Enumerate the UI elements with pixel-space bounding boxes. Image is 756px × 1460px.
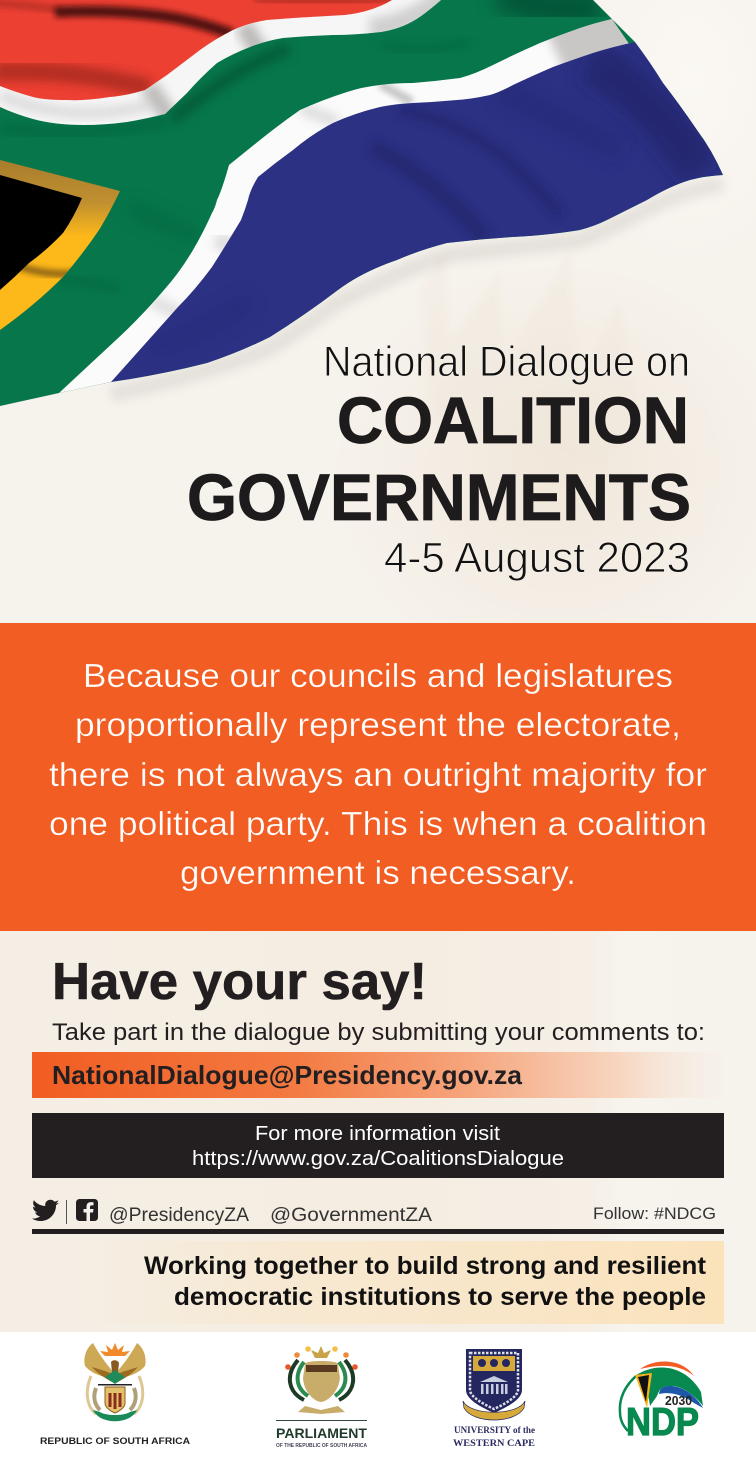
title: COALITION: COALITION [337,383,689,457]
flag shadow [111,184,723,394]
South African flag [0,0,756,420]
flag: gold chevron edge [0,160,120,330]
flag: lower white band [59,10,640,393]
email bar: NationalDialogue@Presidency.gov.za [52,1060,523,1090]
flag: upper white band [0,0,445,125]
handle: government: @GovernmentZA [270,1205,432,1226]
logo: parliament [276,1346,367,1449]
statement text: Because our councils and legislatures [83,658,673,695]
logo text: REPUBLIC OF SOUTH AFRICA [40,1436,190,1447]
tagline band: democratic institutions to serve the people [174,1283,706,1311]
title: GOVERNMENTS: GOVERNMENTS [187,460,691,534]
orange statement panel [0,623,756,931]
logo text: UNIVERSITY of the [454,1425,535,1435]
social media row [32,1199,716,1226]
tagline band: Working together to build strong and resilient [144,1252,707,1280]
title: date: 4-5 August 2023 [384,534,690,582]
logo: NDP 2030 [620,1361,703,1444]
information box [32,1113,724,1178]
statement text: government is necessary. [180,855,576,892]
icon: facebook [76,1199,98,1221]
title block [187,338,691,582]
statement text: one political party. This is when a coalition [49,806,707,843]
email bar [32,1052,724,1098]
information box: https://www.gov.za/CoalitionsDialogue [192,1148,564,1170]
logo text: PARLIAMENT [276,1425,367,1441]
flag: red stripe [0,0,400,100]
statement text [49,658,707,892]
hashtag: Follow: #NDCG [593,1204,716,1223]
logo: university of the western cape [453,1349,535,1448]
footer strip [0,1332,756,1460]
title: line 1: National Dialogue on [323,338,690,386]
logo: university of the western cape: WESTERN CAPE [453,1438,535,1448]
intro text: Take part in the dialogue by submitting your comments to: [52,1019,705,1046]
flag: blue stripe [111,42,723,382]
flag: green field [0,0,756,420]
statement text: there is not always an outright majority for [49,757,707,794]
statement text: proportionally represent the electorate, [75,707,681,744]
flag: black triangle [0,175,82,290]
logo: NDP 2030: 2030 [665,1394,692,1408]
heading: have your say: Have your say! [52,953,427,1011]
logo: coat of arms [40,1343,190,1447]
separator [66,1200,67,1224]
logo: NDP 2030: NDP [626,1401,699,1444]
tagline band [90,1241,724,1324]
handle: presidency: @PresidencyZA [109,1205,249,1226]
information box: For more information visit [255,1123,500,1145]
logo: parliament: OF THE REPUBLIC OF SOUTH AFRICA [276,1443,367,1449]
icon: twitter [32,1200,59,1221]
